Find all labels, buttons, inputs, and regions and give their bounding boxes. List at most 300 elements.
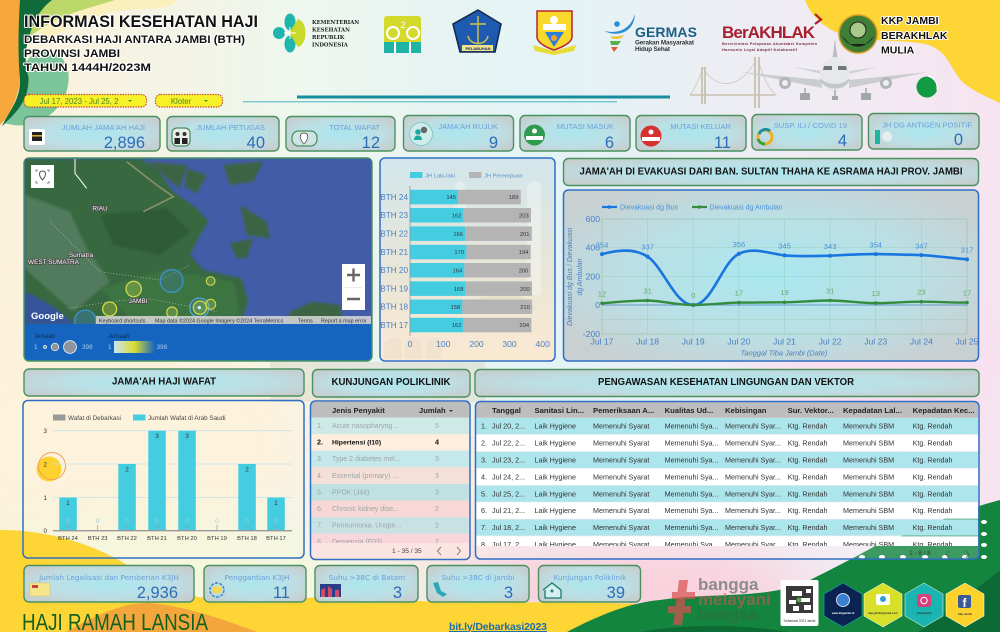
table body: Memenuhi SBM [843, 540, 894, 549]
table body: Sanitasi Lin... [534, 406, 584, 415]
x axis labels: Jul 20 [727, 336, 751, 346]
icon: yellow circle [36, 452, 66, 482]
filter: kloter [156, 94, 222, 107]
table body: Memenuhi SBM [843, 422, 894, 431]
bar values: 203 [519, 213, 529, 219]
heading: evakuasi: JAMA'AH DI EVAKUASI DARI BAN. SULTAN THAHA KE ASRAMA HAJI PROV. JAMBI [580, 166, 963, 178]
social: facebook [946, 583, 984, 627]
table body: Memenuhi Syarat [593, 472, 649, 481]
series: ambulan: 17 [735, 288, 743, 298]
filter: date range [24, 94, 146, 107]
logo: kementerian kesehatan [273, 14, 359, 52]
table rows: Chronic kidney dise... [332, 506, 399, 513]
table body: 8. [481, 540, 487, 549]
x axis title: Tanggal Tiba Jambi (Date) [741, 348, 828, 358]
kpi: antigen positif [868, 114, 979, 149]
kpi: total wafat: 12 [362, 134, 380, 152]
kpi: suhu jambi: Suhu >38C di Jambi [441, 573, 515, 582]
logo: bangga melayani bangsa: bangga [698, 575, 759, 594]
table body: Ktg. Rendah [913, 439, 953, 448]
kpi: mutasi keluar: MUTASI KELUAR [670, 122, 732, 131]
table body: Ktg. Rendah [788, 456, 828, 464]
table body: Ktg. Rendah [913, 489, 953, 498]
bar labels: 0 [185, 518, 189, 525]
kpi: jamaah rujuk: JAMA'AH RUJUK [438, 122, 498, 131]
social: instagram: @kkpjambi [917, 611, 932, 615]
table rows: 3 [435, 489, 439, 496]
pagination [392, 547, 460, 555]
category labels: BTH 19 [380, 285, 408, 294]
legend: Dievakuasi dg Ambulan [710, 204, 783, 212]
table body: Laik Hygiene [534, 472, 576, 481]
kpi: kunjungan poliklinik: 39 [607, 584, 625, 602]
panel: bar chart jemaah [380, 158, 555, 361]
kpi: suhu batam: 3 [393, 584, 402, 602]
table rows: Type 2 diabetes mel... [332, 456, 401, 463]
table rows: 3 [435, 456, 439, 463]
title: INFORMASI KESEHATAN HAJI [24, 12, 258, 31]
bar values: 162 [452, 213, 462, 219]
table body: Jul 25, 2... [492, 489, 525, 498]
kpi: jumlah petugas: 40 [247, 134, 265, 152]
heading: jamaah haji wafat: JAMA'AH HAJI WAFAT [112, 376, 217, 388]
gridlines [53, 431, 292, 498]
filter: kloter: Kloter [171, 97, 192, 106]
plot grid [602, 219, 967, 334]
social: website: www.kkpjambi.id [831, 611, 855, 615]
logo: kementerian kesehatan: KESEHATAN [312, 28, 350, 34]
bar labels: 1 [274, 500, 278, 507]
value axis: 300 [502, 339, 517, 349]
table rows: 2 [435, 523, 439, 530]
table body: Memenuhi Sya... [665, 489, 719, 498]
table body: Ktg. Rendah [788, 422, 828, 431]
table rows: 8. [317, 539, 323, 546]
title: PROVINSI JAMBI [24, 48, 120, 60]
series: ambulan: 23 [917, 288, 926, 297]
kpi: mutasi keluar [636, 116, 746, 152]
table rows: 3 [435, 473, 439, 480]
panel: bar chart wafat [23, 400, 304, 558]
decoration: green dot [916, 76, 938, 98]
table body: Ktg. Rendah [788, 540, 828, 549]
y axis: 3 [44, 428, 48, 435]
y axis: 2 [44, 462, 48, 468]
series: ambulan: 31 [826, 287, 834, 296]
table body: Ktg. Rendah [788, 506, 828, 515]
table rows: 7. [317, 523, 323, 530]
kpi: legalisasi k3jh [24, 566, 194, 602]
legend [602, 204, 783, 212]
bar values: 201 [520, 232, 530, 238]
table rows [311, 402, 469, 546]
logo: germas: Gerakan Masyarakat [635, 40, 695, 46]
heading: kunjungan poliklinik [312, 370, 470, 397]
kpi: penggantian k3jh [204, 566, 306, 602]
kpi: kunjungan poliklinik [538, 566, 640, 602]
series: bus: 354 [596, 240, 608, 250]
table rows: Jumlah [419, 406, 446, 415]
qr code: Debarkasi 2023 Jambi [784, 619, 816, 623]
bar values: 210 [520, 305, 530, 311]
table body: Laik Hygiene [534, 456, 576, 464]
series: ambulan: 13 [871, 289, 880, 298]
table body: Memenuhi Sya... [665, 439, 719, 448]
panel: map: JAMBI [129, 298, 148, 305]
table rows: 2 [435, 539, 439, 546]
table body: Pemeriksaan A... [593, 406, 654, 415]
x axis labels [591, 336, 979, 346]
series: ambulan [598, 287, 971, 307]
legend: Wafat di Debarkasi [68, 415, 121, 422]
kpi: susp ili covid [752, 114, 862, 150]
bar values: 194 [519, 250, 529, 256]
kpi: total wafat [286, 116, 395, 152]
table rows: 3. [317, 456, 323, 463]
table body: Ktg. Rendah [788, 489, 828, 498]
map legend: 398 [82, 344, 93, 351]
logo: pelabuhan [453, 10, 501, 52]
kpi: mutasi masuk [520, 116, 630, 152]
table body [476, 402, 978, 552]
google attribution: Report a map error [321, 318, 367, 324]
social: instagram [905, 583, 943, 627]
x axis: BTH 24 [58, 536, 79, 542]
logo: bangga melayani bangsa [668, 575, 771, 625]
x axis: BTH 23 [88, 536, 108, 542]
kpi: susp ili covid: 4 [838, 132, 847, 150]
x axis labels: Jul 25 [956, 336, 979, 346]
table body: Memenuhi SBM [843, 523, 894, 532]
bar labels: 0 [125, 518, 129, 525]
google attribution: Terms [298, 318, 313, 324]
panel: line chart evakuasi [564, 190, 979, 361]
table body: Memenuhi Sya... [665, 472, 719, 481]
x axis [58, 536, 286, 542]
table body: Jul 24, 2... [492, 472, 525, 481]
google attribution: Google [31, 311, 64, 322]
table rows: 6. [317, 506, 323, 513]
y axis labels [583, 214, 600, 339]
bar values: 168 [454, 287, 464, 293]
decoration: bridge [690, 57, 776, 108]
social: facebook: Kkp Jambi [958, 612, 972, 616]
table body: Laik Hygiene [534, 439, 576, 448]
map legend [34, 334, 168, 353]
kpi: legalisasi k3jh: Jumlah Legalisasi dan Pemberian K3JH [38, 573, 179, 582]
panel: tabel poliklinik [310, 401, 470, 560]
kpi: antigen positif: 0 [954, 131, 963, 149]
table body: Kepadatan Lal... [843, 406, 902, 415]
kpi: jamaah rujuk: 9 [489, 134, 498, 152]
table rows: Jenis Penyakit [332, 406, 385, 415]
y axis labels: 0 [595, 300, 600, 310]
table rows: Hipertensi (I10) [332, 440, 381, 447]
table body: Memenuhi Sya... [665, 540, 719, 549]
logo: kementerian kesehatan: REPUBLIK [312, 35, 345, 41]
table body: Jul 21, 2... [492, 506, 525, 515]
bar labels [66, 433, 278, 525]
pagination: 1 - 35 / 35 [392, 548, 422, 555]
header divider lines [243, 96, 670, 102]
table rows: Peneumonia, Unspe... [332, 523, 401, 530]
logo: p2p: 2 [400, 20, 406, 30]
kpi: suhu batam: Suhu >38C di Batam [329, 573, 405, 582]
table body: Ktg. Rendah [913, 540, 953, 549]
kpi: legalisasi k3jh: 2,936 [137, 584, 178, 602]
logo: germas: GERMAS [635, 24, 697, 40]
title [24, 12, 258, 74]
y axis labels: 600 [586, 214, 600, 224]
bar values: 164 [453, 268, 463, 274]
title: DEBARKASI HAJI ANTARA JAMBI (BTH) [24, 34, 245, 46]
legend [53, 414, 225, 422]
kpi: jumlah jamaah haji: 2,896 [104, 134, 145, 152]
x axis: BTH 18 [237, 536, 257, 542]
category labels: BTH 18 [380, 303, 408, 312]
y axis title: dg Ambulan [577, 258, 584, 296]
table rows: 5 [435, 423, 439, 430]
table body: Memenuhi Syar... [725, 523, 781, 532]
kpi: jumlah petugas [167, 116, 279, 152]
category labels: BTH 20 [380, 266, 408, 275]
y axis: 1 [44, 495, 48, 502]
y axis labels: -200 [583, 329, 600, 339]
logo: germas [604, 14, 697, 53]
panel: map: WEST SUMATRA [28, 259, 80, 266]
social: email: kkp.jambi@ymail.com [868, 611, 898, 615]
table body: Memenuhi Sya... [665, 506, 719, 515]
bar labels: 3 [155, 433, 159, 440]
kpi: kunjungan poliklinik: Kunjungan Poliklinik [554, 573, 627, 582]
table body: Kebisingan [725, 406, 767, 415]
table body: Memenuhi Sya... [665, 422, 719, 431]
kpi: jumlah jamaah haji: JUMLAH JAMA'AH HAJI [62, 123, 145, 132]
category labels: BTH 21 [380, 248, 408, 257]
value axis: 200 [469, 339, 484, 349]
series: ambulan: 17 [963, 288, 971, 298]
y axis: 0 [44, 528, 48, 535]
icon: location locate [31, 165, 54, 188]
logo: berakhlak: BerAKHLAK [722, 23, 816, 42]
heading: evakuasi [564, 158, 978, 186]
table body: Laik Hygiene [534, 422, 576, 431]
logo: kementerian kesehatan: INDONESIA [312, 42, 349, 48]
table body: Laik Hygiene [534, 523, 576, 532]
table body: Ktg. Rendah [913, 422, 953, 431]
google attribution [31, 311, 371, 324]
map legend: Jemaah [108, 334, 129, 340]
category labels: BTH 24 [380, 193, 408, 202]
x axis labels: Jul 19 [682, 336, 705, 346]
kpi: suhu jambi: 3 [504, 584, 513, 602]
table rows: Essential (primary) ... [332, 473, 398, 480]
table body: Memenuhi Syarat [593, 456, 649, 464]
heading: pengawasan kesehatan: PENGAWASAN KESEHATAN LINGUNGAN DAN VEKTOR [598, 377, 854, 388]
table body: Laik Hygiene [534, 489, 576, 498]
value axis [408, 339, 550, 349]
x axis labels: Jul 18 [636, 336, 659, 346]
table rows: 5. [317, 489, 323, 496]
table body: Memenuhi Syar... [725, 540, 781, 549]
table body: Memenuhi Syar... [725, 422, 781, 431]
table body: Jul 22, 2... [492, 439, 525, 448]
category labels: BTH 22 [380, 230, 408, 239]
bar labels: 0 [245, 518, 249, 525]
series: bus: 356 [733, 240, 745, 249]
bar values [446, 195, 530, 329]
table body: 5. [481, 489, 487, 498]
table body: Jul 20, 2... [492, 422, 525, 431]
table body: Memenuhi SBM [843, 489, 894, 498]
legend: JH Perempuan [484, 174, 523, 180]
series: bus: 337 [641, 242, 654, 252]
social: email [864, 583, 902, 627]
table body: Memenuhi Syarat [593, 523, 649, 532]
x axis: BTH 21 [147, 536, 167, 542]
y axis title [567, 228, 584, 326]
x axis labels: Jul 21 [773, 336, 796, 346]
logo: bangga melayani bangsa: melayani [698, 590, 771, 609]
table body: Ktg. Rendah [788, 523, 828, 532]
table body: Memenuhi Syar... [725, 472, 781, 481]
category labels: BTH 17 [380, 321, 408, 330]
logo: bangga melayani bangsa: bangsa [698, 605, 758, 624]
bar labels: 3 [185, 433, 189, 440]
table rows: 2 [435, 506, 439, 513]
table body: Ktg. Rendah [788, 439, 828, 448]
kpi: mutasi keluar: 11 [714, 134, 731, 152]
table rows: 4 [435, 438, 439, 447]
value axis: 400 [536, 339, 550, 349]
logo: p2p [384, 16, 421, 53]
kpi: suhu jambi [427, 566, 529, 602]
y axis labels: 200 [586, 271, 600, 281]
x axis: BTH 20 [177, 536, 197, 542]
table body: Memenuhi Syarat [593, 489, 649, 498]
panel: tabel pengawasan [476, 402, 979, 559]
x axis labels: Jul 17 [591, 336, 614, 346]
bar labels: 0 [215, 518, 219, 525]
heading: jamaah haji wafat [24, 369, 304, 396]
table body: Ktg. Rendah [913, 523, 953, 532]
bar labels: 2 [125, 466, 129, 474]
map zoom control [342, 264, 365, 310]
bar labels: 0 [274, 518, 278, 525]
bar values: 200 [519, 268, 528, 274]
series: bus [596, 240, 973, 307]
social: facebook: f [962, 596, 968, 610]
kpi: jamaah rujuk [404, 116, 514, 152]
table body: Kepadatan Kec... [913, 406, 975, 415]
table body: 4. [481, 472, 487, 481]
kpi: suhu batam [315, 566, 418, 602]
legend [410, 172, 523, 180]
bar values: 162 [452, 323, 462, 329]
series: bus: 354 [869, 240, 882, 250]
series: bus: 317 [961, 246, 973, 255]
panel: map: Sumatra [69, 252, 94, 259]
table body: Memenuhi Sya... [665, 523, 719, 532]
logo: berakhlak: Berorientasi Pelayanan Akuntabel Kompeten [722, 41, 818, 46]
qr code [780, 580, 818, 626]
table body: 3. [481, 456, 487, 464]
bar values: 166 [453, 232, 463, 238]
table body: Sur. Vektor... [788, 406, 834, 415]
series: bus: 345 [778, 242, 791, 250]
panel: map: RIAU [92, 206, 108, 212]
google attribution: Map data ©2024 Google Imagery ©2024 TerraMetrics [155, 318, 284, 324]
table body: Ktg. Rendah [913, 456, 953, 464]
y axis title: Dievakuasi dg Bus / Dievakuasi [567, 228, 574, 326]
pagination [909, 550, 969, 558]
table body: Laik Hygiene [534, 540, 576, 549]
logo: kementerian kesehatan: KEMENTERIAN [312, 20, 359, 26]
bars [53, 431, 292, 531]
table body: Ktg. Rendah [788, 472, 828, 481]
logo: kkp jambi [839, 15, 948, 56]
google attribution: Keyboard shortcuts [99, 318, 146, 324]
x axis labels: Jul 24 [910, 336, 933, 346]
kpi: penggantian k3jh: 11 [273, 584, 290, 602]
value axis: 0 [408, 339, 413, 349]
table body: Jul 17, 2... [492, 540, 525, 549]
table body: Memenuhi SBM [843, 472, 894, 481]
table body: Kualitas Ud... [665, 406, 713, 415]
satellite map [25, 159, 371, 331]
table body: Memenuhi SBM [843, 439, 894, 448]
bar values: 189 [509, 195, 518, 201]
legend: Dievakuasi dg Bus [620, 204, 678, 212]
table body: 1. [481, 422, 487, 431]
logo: germas: Hidup Sehat [635, 46, 671, 53]
logo: berakhlak [722, 14, 821, 52]
bar labels: 0 [155, 518, 159, 525]
table body: Jul 18, 2... [492, 523, 525, 532]
logo: berakhlak: Harmonis Loyal Adaptif Kolaboratif [722, 47, 798, 52]
table body: Memenuhi Syarat [593, 422, 649, 431]
table rows: Demensia (F03) [332, 539, 382, 546]
kpi: mutasi masuk: 6 [605, 134, 614, 152]
kpi: susp ili covid: SUSP. ILI / COVID 19 [774, 121, 847, 130]
table body: Laik Hygiene [534, 506, 576, 515]
map legend: 398 [156, 344, 168, 351]
table body: Ktg. Rendah [913, 472, 953, 481]
table body: Jul 23, 2... [492, 456, 525, 464]
bar labels: 0 [66, 518, 70, 525]
bar values: 170 [454, 250, 464, 256]
x axis: BTH 17 [266, 536, 286, 542]
legend: Jumlah Wafat di Arab Saudi [148, 415, 225, 422]
logo: pelabuhan: PELABUHAN [465, 46, 491, 51]
table body: 6. [481, 506, 487, 515]
table body: Memenuhi Syarat [593, 540, 649, 549]
table body: Memenuhi Syar... [725, 506, 781, 515]
kpi: antigen positif: JH DG ANTIGEN POSITIF [882, 120, 972, 130]
table body: Memenuhi Syar... [725, 489, 781, 498]
bar values: 200 [520, 287, 530, 293]
social: website [824, 583, 862, 627]
pagination: 1 - 8 / 8 [909, 550, 931, 557]
table body: Memenuhi Syarat [593, 506, 649, 515]
logo: kkp jambi: MULIA [881, 44, 915, 56]
y axis [44, 428, 48, 535]
table body: Memenuhi Sya... [665, 456, 719, 464]
table body: Tanggal [492, 406, 521, 415]
table body: Memenuhi Syarat [593, 439, 649, 448]
title: TAHUN 1444H/2023M [24, 62, 151, 74]
panel: map [24, 158, 372, 361]
